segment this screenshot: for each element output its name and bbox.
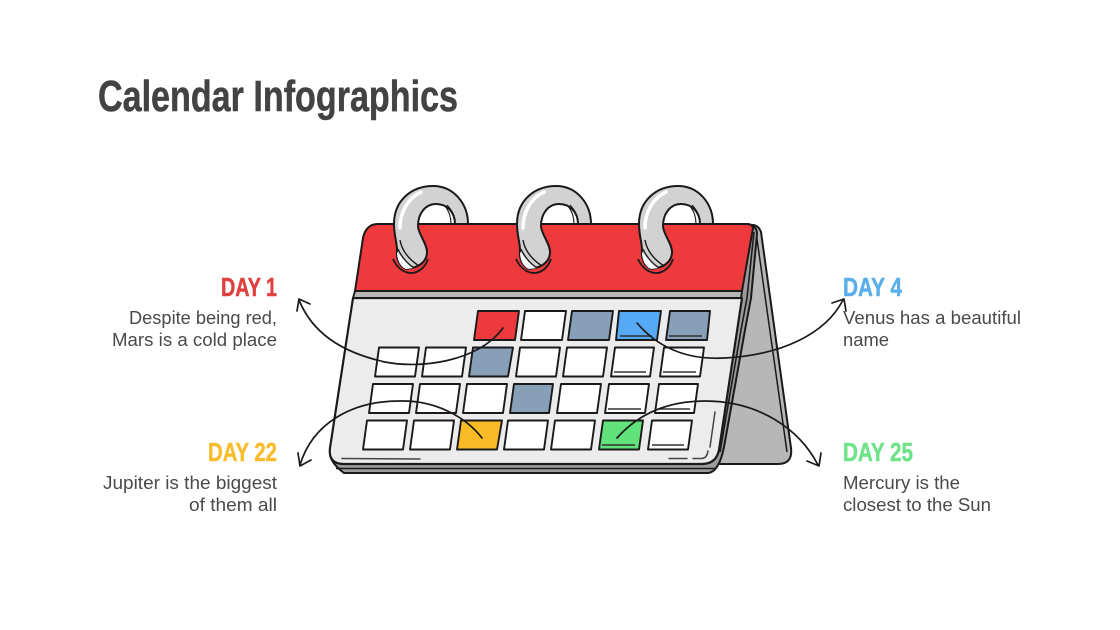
callout: Day 4: name: [843, 330, 889, 350]
row 4: [363, 420, 692, 450]
title: Calendar Infographics: [98, 72, 458, 121]
callout: Day 1: DAY 1: [221, 272, 277, 302]
callout: Day 25: closest to the Sun: [843, 495, 991, 515]
date grid: [363, 311, 710, 450]
callout: Day 25: DAY 25: [843, 437, 913, 467]
callout: Day 4: Venus has a beautiful: [843, 308, 1021, 328]
page edge details: [342, 412, 715, 459]
page stack edge: [330, 224, 757, 473]
arrow: Mercury: [617, 401, 821, 466]
row 1: [474, 311, 710, 340]
arrow: Jupiter: [298, 401, 482, 466]
callout: Day 4: DAY 4: [843, 272, 902, 302]
arrow: Mars: [297, 299, 503, 364]
back panel: [716, 225, 791, 464]
cell shading lines: [602, 336, 702, 445]
red header: [355, 224, 753, 291]
callout: Day 22: of them all: [189, 495, 277, 515]
callout: Day 1: [112, 272, 277, 350]
callout: Day 25: [843, 437, 991, 515]
callout: Day 25: Mercury is the: [843, 473, 960, 493]
row 3: [369, 384, 698, 413]
calendar page: [330, 298, 742, 464]
arrow: Venus: [637, 299, 846, 358]
binding holes: [393, 259, 673, 273]
callout: Day 22: [103, 437, 277, 515]
callout: Day 22: Jupiter is the biggest: [103, 473, 277, 493]
callout: Day 4: [843, 272, 1021, 350]
spiral rings: [394, 186, 713, 269]
grey band: [353, 291, 742, 298]
callout: Day 22: DAY 22: [208, 437, 277, 467]
callout: Day 1: Despite being red,: [129, 308, 277, 328]
row 2: [375, 348, 704, 376]
calendar illustration: [330, 186, 791, 473]
callout: Day 1: Mars is a cold place: [112, 330, 277, 350]
